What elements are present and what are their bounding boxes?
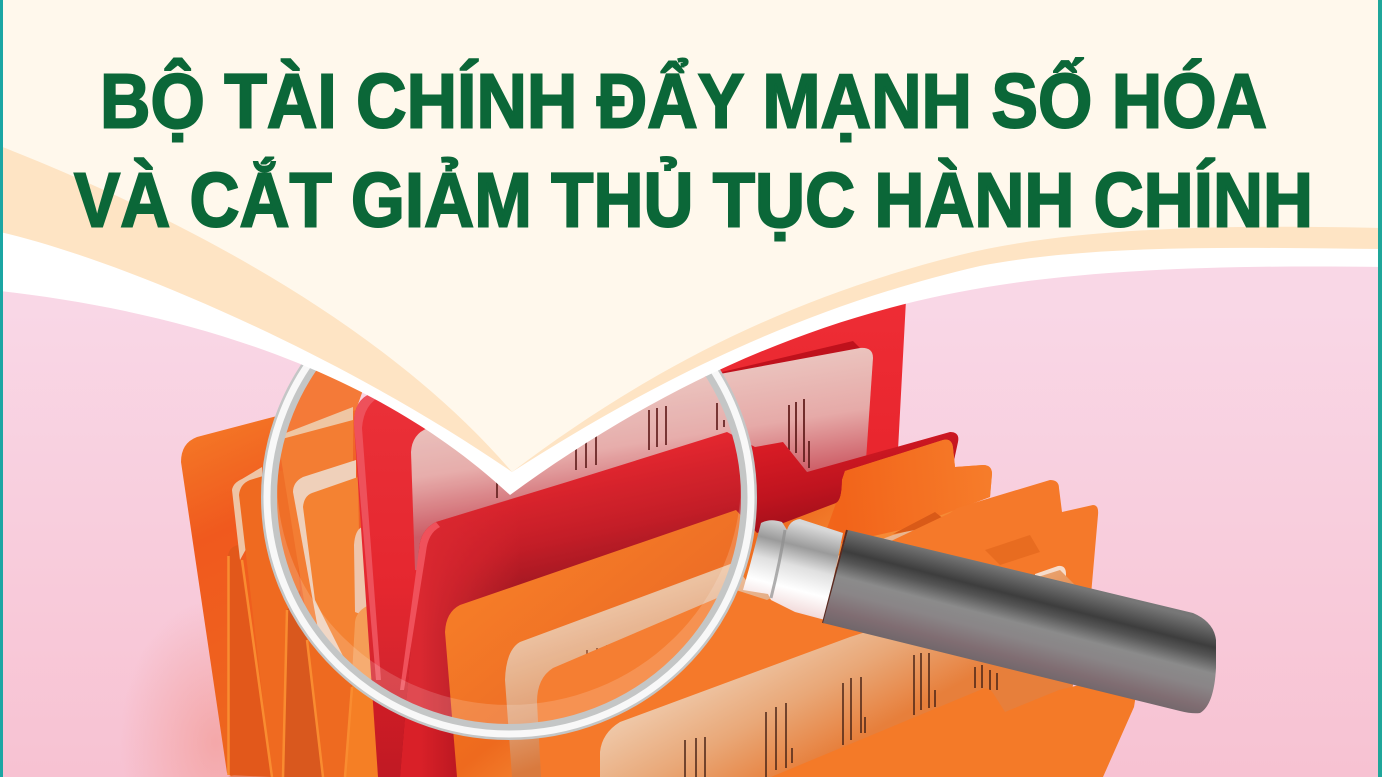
teal left edge (0, 0, 3, 777)
beige curved band (0, 0, 1382, 472)
orange folder two with tab (537, 480, 1098, 777)
title (74, 58, 1313, 244)
strip highlights (242, 560, 352, 777)
red front folder left tone (400, 496, 520, 777)
shadow band on orange folder two (985, 535, 1040, 565)
red highlight edge (400, 522, 440, 690)
cream title panel (0, 0, 1382, 472)
refracted folders inside lens (281, 370, 372, 680)
small orange divider (352, 606, 372, 680)
divider edge (227, 556, 230, 775)
folder base (228, 765, 272, 777)
beige paper in orange folder (505, 522, 945, 777)
dark recess behind paper (722, 341, 862, 384)
orange folder with tab (445, 440, 992, 777)
orange tab tone (820, 440, 992, 548)
orange sheet (303, 477, 359, 665)
large beige paper front (600, 570, 1090, 777)
light strip (345, 660, 378, 777)
back divider (228, 545, 272, 777)
illustration: file folders (181, 300, 1140, 777)
white curved band (0, 0, 1382, 495)
magnifying glass (261, 364, 1216, 740)
barcode marks on large paper (685, 653, 997, 777)
lens lower glow (270, 480, 750, 730)
beige band (285, 407, 353, 438)
dark strip (283, 590, 323, 777)
title line 1: BỘ TÀI CHÍNH ĐẨY MẠNH SỐ HÓA (100, 58, 1267, 144)
red folder back panel (354, 300, 906, 777)
top orange (286, 370, 362, 432)
red front folder with tab (400, 432, 958, 777)
small beige (354, 528, 366, 614)
ferrule (743, 519, 843, 620)
lens ring highlight (267, 260, 751, 734)
orange panel (281, 420, 353, 624)
lens tint (276, 269, 742, 725)
left beige sheet (232, 467, 262, 560)
ferrule shadow line (771, 530, 785, 598)
red corner highlight (354, 393, 384, 680)
lens ring (269, 262, 749, 732)
back orange folder (181, 398, 380, 777)
teal right edge (1378, 0, 1382, 777)
paper in red folder (411, 348, 873, 600)
small paper peeking near handle (1035, 566, 1066, 592)
ferrule dark joint (823, 530, 847, 623)
beige sheet (293, 460, 356, 656)
barcode marks on red paper (497, 399, 809, 498)
front orange folder (771, 670, 1140, 777)
shadow above beige paper (893, 512, 945, 534)
soft shadow beside folders (120, 600, 240, 777)
tick marks on beige paper (587, 618, 684, 660)
orange folder two (239, 468, 300, 777)
handle (823, 530, 1216, 713)
mid strip (307, 620, 352, 777)
